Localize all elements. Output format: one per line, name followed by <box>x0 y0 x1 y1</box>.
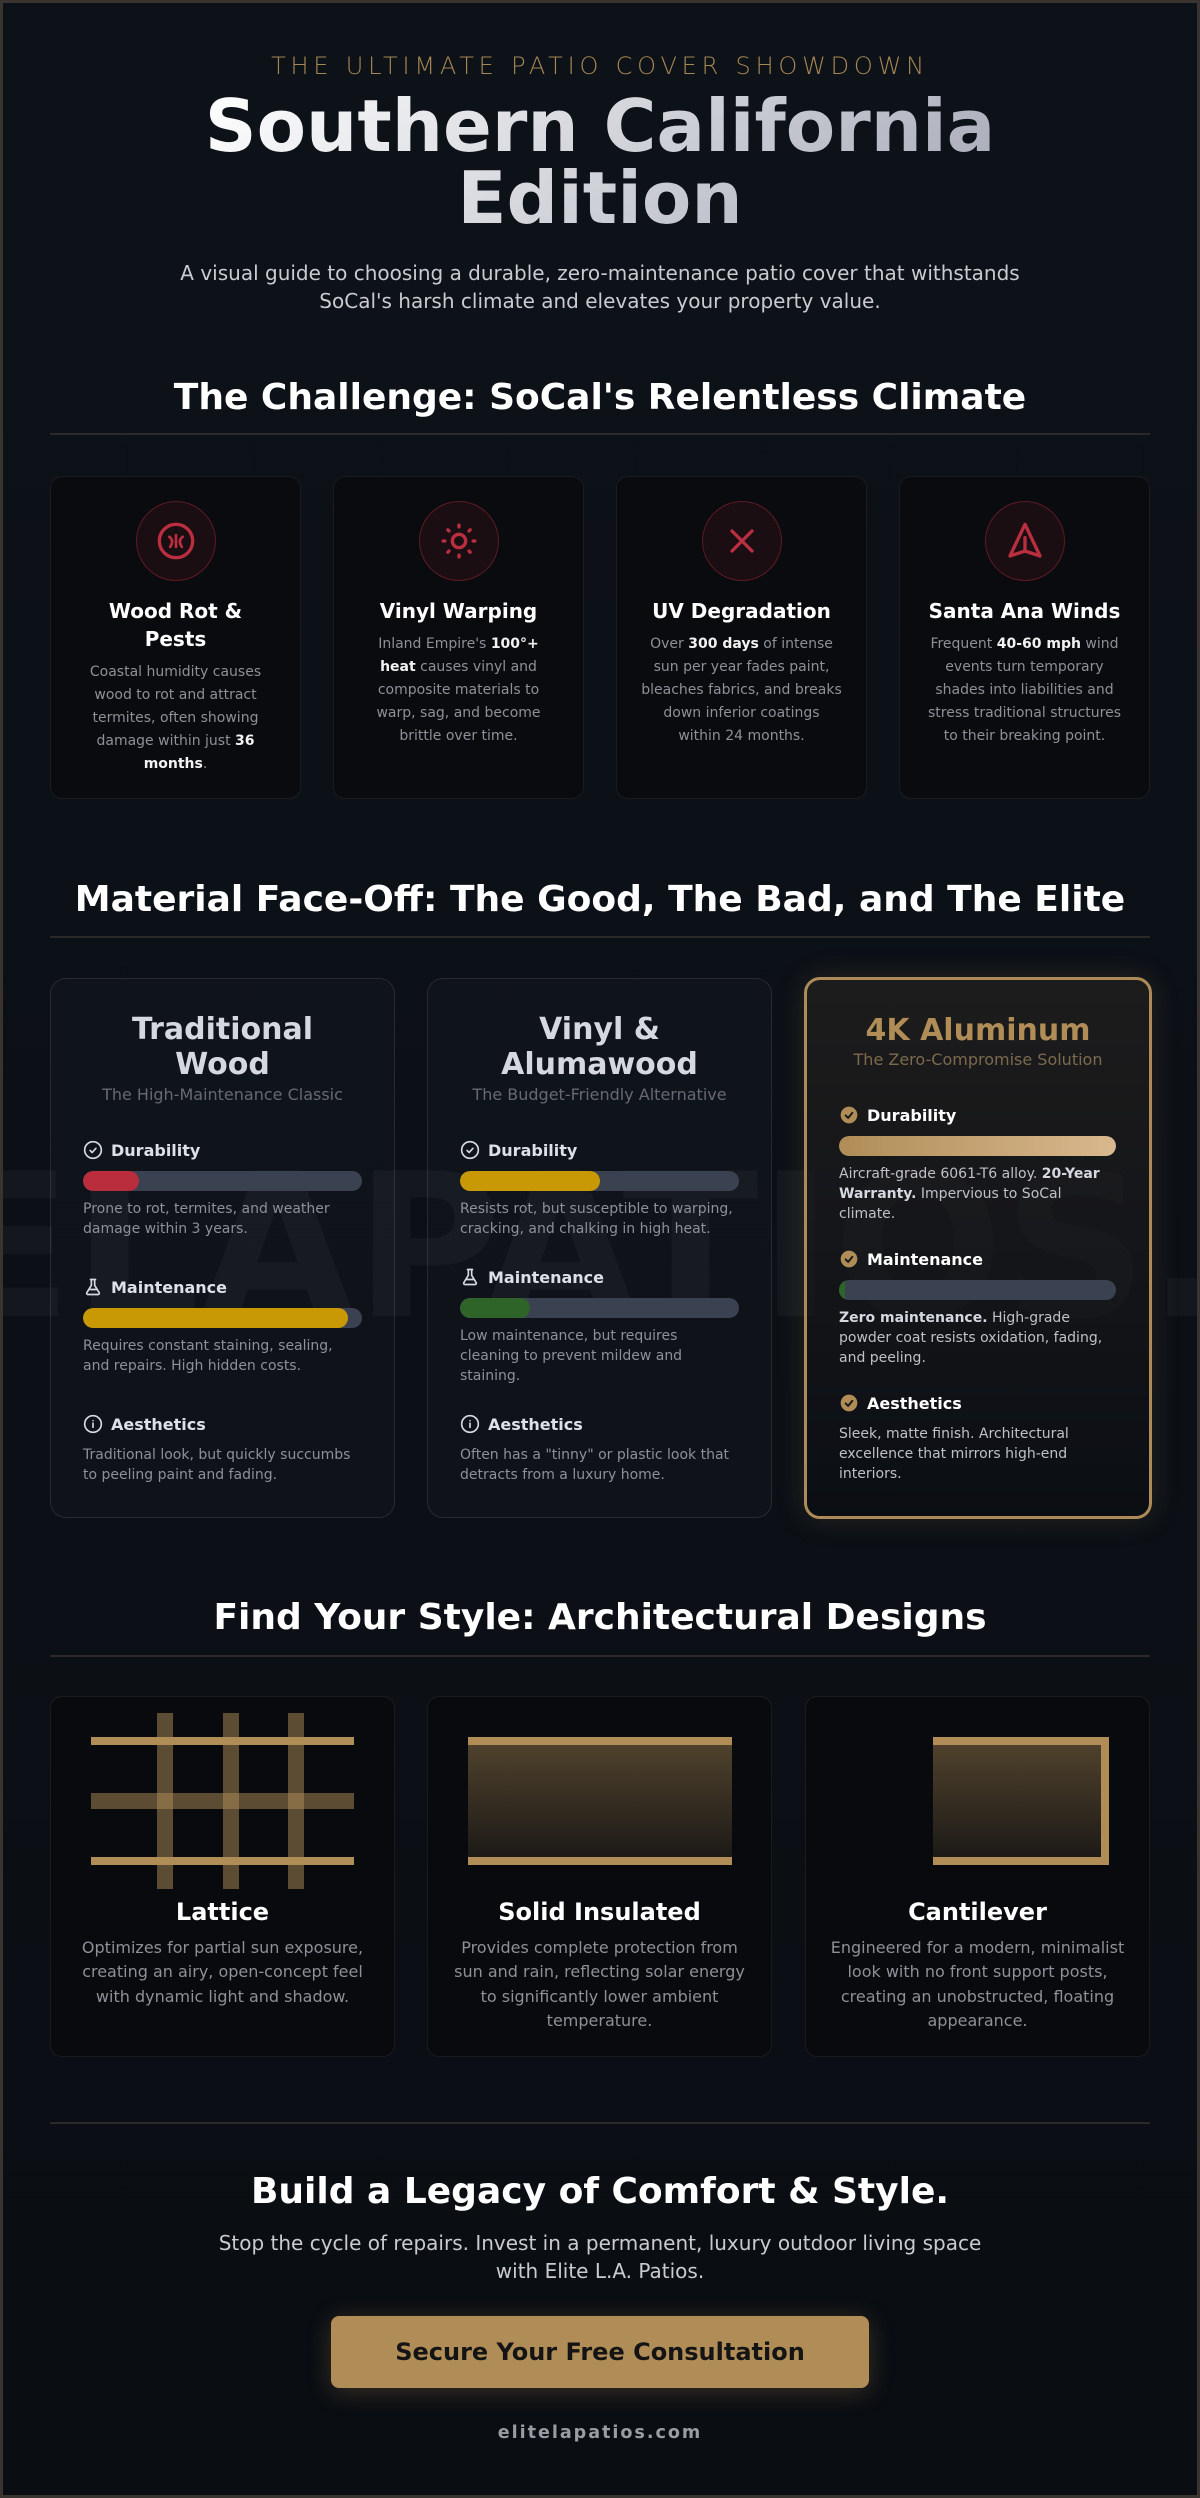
metric text: Zero maintenance. High-grade <box>839 1310 1070 1326</box>
card text: termites, often showing <box>93 710 258 726</box>
style text: Optimizes for partial sun exposure, <box>82 1938 363 1957</box>
material title <box>501 1012 698 1082</box>
title: Southern California <box>205 84 995 168</box>
metric label: aesthetics: Aesthetics <box>111 1414 206 1434</box>
style text: temperature. <box>547 2011 652 2030</box>
panel: vinyl warping <box>333 476 584 799</box>
panel: wood rot and pests <box>50 476 301 799</box>
material title: Vinyl & <box>539 1012 660 1047</box>
card text: brittle over time. <box>399 728 518 744</box>
metric text <box>839 1426 1069 1482</box>
card text <box>90 664 261 772</box>
card text: stress traditional structures <box>928 705 1121 721</box>
card text: months. <box>144 756 207 772</box>
eyebrow: THE ULTIMATE PATIO COVER SHOWDOWN <box>271 52 929 80</box>
style title: Cantilever <box>908 1898 1047 1926</box>
metric text <box>839 1166 1100 1222</box>
card title <box>109 599 242 651</box>
style title: Solid Insulated <box>498 1898 701 1926</box>
material title: Traditional <box>132 1012 313 1047</box>
metric text: staining. <box>460 1368 520 1384</box>
panel: 4k aluminum <box>804 977 1152 1519</box>
heading: the challenge: The Challenge: SoCal's Relentless Climate <box>174 377 1026 418</box>
subtitle: A visual guide to choosing a durable, zero-maintenance patio cover that withstands <box>180 261 1020 285</box>
metric text: interiors. <box>839 1466 902 1482</box>
style title: Lattice <box>176 1898 269 1926</box>
style text: creating an airy, open-concept feel <box>82 1962 363 1981</box>
card title: Pests <box>145 627 206 651</box>
icon: sun <box>419 501 499 581</box>
panel: cantilever <box>805 1696 1150 2057</box>
metric text: Requires constant staining, sealing, <box>83 1338 333 1354</box>
call to action text <box>219 2231 981 2283</box>
card text: down inferior coatings <box>663 705 820 721</box>
metric text: climate. <box>839 1206 895 1222</box>
diagram: solid <box>468 1737 732 1865</box>
metric text: detracts from a luxury home. <box>460 1467 665 1483</box>
metric text: Sleek, matte finish. Architectural <box>839 1426 1069 1442</box>
style text: look with no front support posts, <box>847 1962 1108 1981</box>
button: Secure Your Free Consultation <box>395 2338 805 2366</box>
card title: Vinyl Warping <box>380 599 537 623</box>
metric label: durability: Durability <box>867 1106 956 1124</box>
metric text: Aircraft-grade 6061-T6 alloy. 20-Year <box>839 1166 1100 1182</box>
metric text <box>460 1447 729 1483</box>
style text: creating an unobstructed, floating <box>841 1987 1114 2006</box>
title: Edition <box>457 156 743 240</box>
metric text <box>83 1338 333 1374</box>
card text: wood to rot and attract <box>94 687 257 703</box>
metric text: Prone to rot, termites, and weather <box>83 1201 330 1217</box>
metric label: durability: Durability <box>111 1140 200 1160</box>
style text: sun and rain, reflecting solar energy <box>454 1962 745 1981</box>
card text: bleaches fabrics, and breaks <box>641 682 842 698</box>
card text: Frequent 40-60 mph wind <box>930 636 1119 652</box>
card text: shades into liabilities and <box>935 682 1114 698</box>
metric text: powder coat resists oxidation, fading, <box>839 1330 1102 1346</box>
panel: solid insulated <box>427 1696 772 2057</box>
metric text: cracking, and chalking in high heat. <box>460 1221 711 1237</box>
card text: warp, sag, and become <box>376 705 541 721</box>
panel: traditional wood <box>50 978 395 1518</box>
style text <box>454 1938 745 2030</box>
heading: architectural designs: Find Your Style: Architectural Designs <box>213 1597 987 1638</box>
card text <box>928 636 1121 744</box>
metric text: to peeling paint and fading. <box>83 1467 277 1483</box>
icon: x <box>702 501 782 581</box>
metric text <box>460 1201 733 1237</box>
card text: composite materials to <box>378 682 539 698</box>
bar: maintenance <box>839 1280 1116 1300</box>
button <box>331 2316 869 2388</box>
bar: maintenance <box>83 1308 362 1328</box>
call to action heading: Build a Legacy of Comfort & Style. <box>251 2171 949 2212</box>
metric label: maintenance: Maintenance <box>867 1250 983 1268</box>
material title: 4K Aluminum <box>866 1013 1090 1048</box>
metric text: and repairs. High hidden costs. <box>83 1358 301 1374</box>
heading: material face-off: Material Face-Off: The Good, The Bad, and The Elite <box>75 879 1125 920</box>
card text: Inland Empire's 100°+ <box>378 636 539 652</box>
card text: within 24 months. <box>678 728 805 744</box>
bar: durability <box>460 1171 739 1191</box>
metric text <box>460 1328 682 1384</box>
call to action text: Stop the cycle of repairs. Invest in a permanent, luxury outdoor living space <box>219 2231 981 2255</box>
panel: uv degradation <box>616 476 867 799</box>
card title: Santa Ana Winds <box>929 599 1120 623</box>
icon: wood rot <box>136 501 216 581</box>
diagram: cantilever <box>933 1737 1109 1865</box>
material title: Alumawood <box>501 1047 698 1082</box>
style text: to significantly lower ambient <box>481 1987 718 2006</box>
subtitle <box>180 261 1020 313</box>
style text: Engineered for a modern, minimalist <box>831 1938 1124 1957</box>
card text: damage within just 36 <box>96 733 255 749</box>
metric label: durability: Durability <box>488 1140 577 1160</box>
bar: durability <box>83 1171 362 1191</box>
card text: sun per year fades paint, <box>654 659 829 675</box>
metric label: aesthetics: Aesthetics <box>488 1414 583 1434</box>
card title: UV Degradation <box>652 599 831 623</box>
metric text: Low maintenance, but requires <box>460 1328 677 1344</box>
icon: navigation <box>985 501 1065 581</box>
card text: to their breaking point. <box>944 728 1105 744</box>
style text: appearance. <box>927 2011 1028 2030</box>
metric text: Traditional look, but quickly succumbs <box>83 1447 350 1463</box>
card text: Over 300 days of intense <box>650 636 833 652</box>
material title <box>132 1012 313 1082</box>
card text <box>376 636 541 744</box>
metric label: aesthetics: Aesthetics <box>867 1394 962 1412</box>
metric text: Resists rot, but susceptible to warping, <box>460 1201 733 1217</box>
bar: durability <box>839 1136 1116 1156</box>
style text: with dynamic light and shadow. <box>96 1987 349 2006</box>
card text: Coastal humidity causes <box>90 664 261 680</box>
material subtitle: The Zero-Compromise Solution <box>854 1050 1102 1069</box>
style text <box>82 1938 363 2006</box>
material subtitle: The Budget-Friendly Alternative <box>472 1085 727 1104</box>
style text <box>831 1938 1124 2030</box>
metric text <box>83 1201 330 1237</box>
style text: Provides complete protection from <box>461 1938 738 1957</box>
metric label: maintenance: Maintenance <box>488 1268 604 1286</box>
metric text: and peeling. <box>839 1350 926 1366</box>
card title: Wood Rot & <box>109 599 242 623</box>
website url: elitelapatios.com <box>498 2423 702 2443</box>
title <box>200 91 1000 234</box>
metric label: maintenance: Maintenance <box>111 1278 227 1296</box>
panel: lattice <box>50 1696 395 2057</box>
bar: maintenance <box>460 1298 739 1318</box>
metric text: Often has a "tinny" or plastic look that <box>460 1447 729 1463</box>
metric text: damage within 3 years. <box>83 1221 248 1237</box>
material subtitle: The High-Maintenance Classic <box>102 1085 343 1104</box>
diagram: lattice <box>91 1713 354 1889</box>
metric text: Warranty. Impervious to SoCal <box>839 1186 1062 1202</box>
card text <box>641 636 842 744</box>
panel: santa ana winds <box>899 476 1150 799</box>
material title: Wood <box>175 1047 270 1082</box>
card text: heat causes vinyl and <box>380 659 537 675</box>
subtitle: SoCal's harsh climate and elevates your property value. <box>319 289 881 313</box>
metric text <box>82 1447 350 1483</box>
panel: vinyl and alumawood <box>427 978 772 1518</box>
metric text: cleaning to prevent mildew and <box>460 1348 682 1364</box>
call to action text: with Elite L.A. Patios. <box>496 2259 704 2283</box>
metric text: excellence that mirrors high-end <box>839 1446 1067 1462</box>
card text: events turn temporary <box>945 659 1104 675</box>
metric text <box>839 1310 1102 1366</box>
